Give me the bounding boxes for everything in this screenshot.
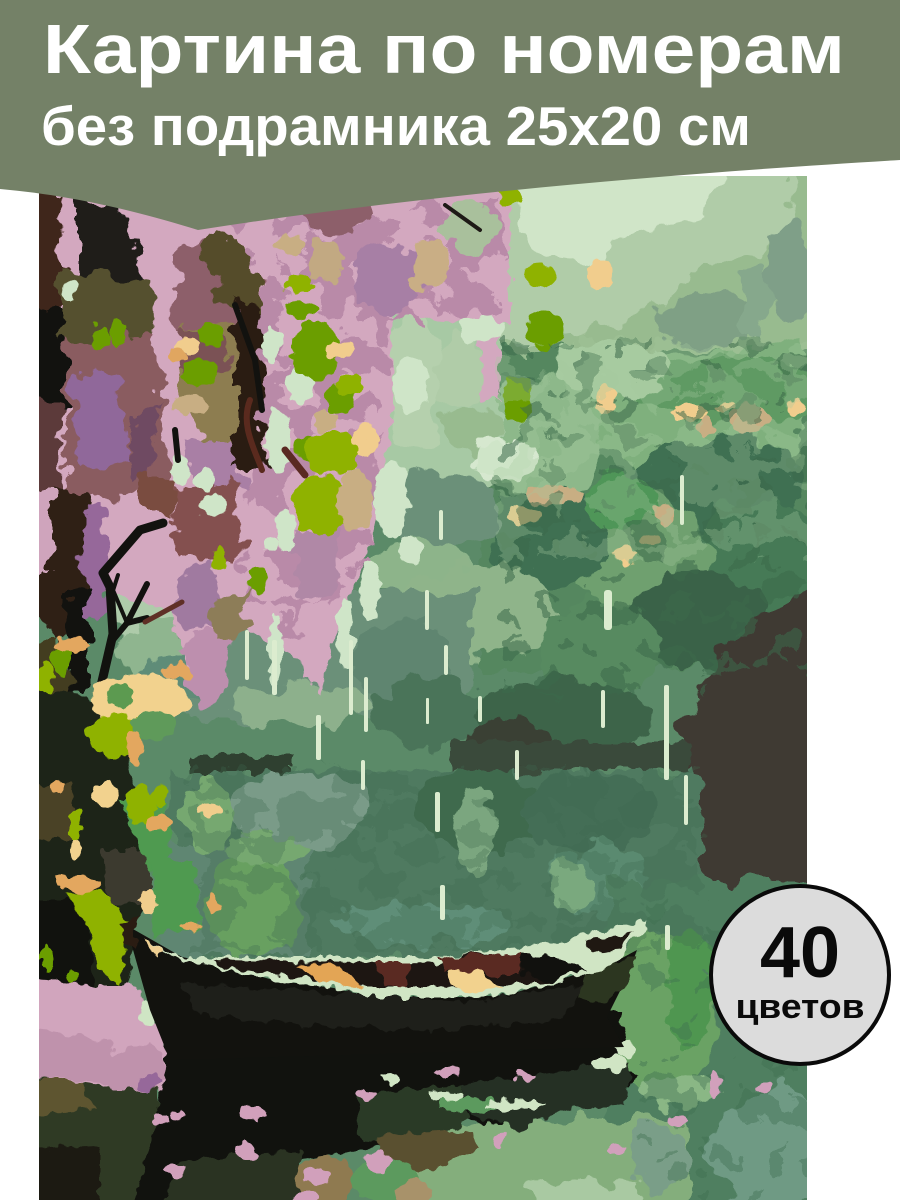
- boat rim and interior: [118, 915, 646, 997]
- boat reflection on the water: [130, 1003, 638, 1200]
- pale centre mist and distant trees: [112, 300, 660, 760]
- title: Картина по номерам: [43, 10, 845, 88]
- badge: 40 colours: цветов: [736, 988, 864, 1026]
- pale mint dabs among the blossom: [62, 280, 533, 686]
- lower left bush with orange and green leaves: [41, 637, 222, 985]
- boat hull shading: [180, 955, 637, 1030]
- tree canopy: mauve tone variation: [183, 199, 500, 710]
- painting: boat on a lake under blossoming trees: [30, 150, 840, 1200]
- pink bank, lower left, with dark foliage below: [39, 978, 168, 1200]
- lake water: [160, 766, 700, 960]
- foliage colour patches: [190, 340, 830, 1200]
- pink petals on the water: [152, 1068, 771, 1200]
- boat hull: [126, 925, 637, 1060]
- right side foliage: [480, 340, 840, 670]
- dark tree branches: [100, 205, 480, 690]
- white hanging drips: [245, 475, 688, 950]
- tree canopy: dark and mauve masses on the left: [30, 190, 168, 700]
- bottom right grass: [400, 880, 840, 1200]
- lower left dark foliage: [30, 690, 200, 1000]
- badge: 40 colours: 40: [760, 913, 840, 993]
- subtitle: без подрамника 25x20 см: [41, 95, 751, 157]
- dark brown far shore: [464, 570, 830, 880]
- header banner: [0, 0, 900, 230]
- leaves and peach blossoms: [37, 185, 804, 698]
- tree canopy: pink base: [54, 192, 516, 668]
- sky and misty background: [500, 176, 807, 360]
- badge: 40 colours: [711, 886, 889, 1064]
- far shoreline band: [190, 742, 690, 773]
- tree canopy: centre brown, olive and maroon column: [140, 235, 340, 640]
